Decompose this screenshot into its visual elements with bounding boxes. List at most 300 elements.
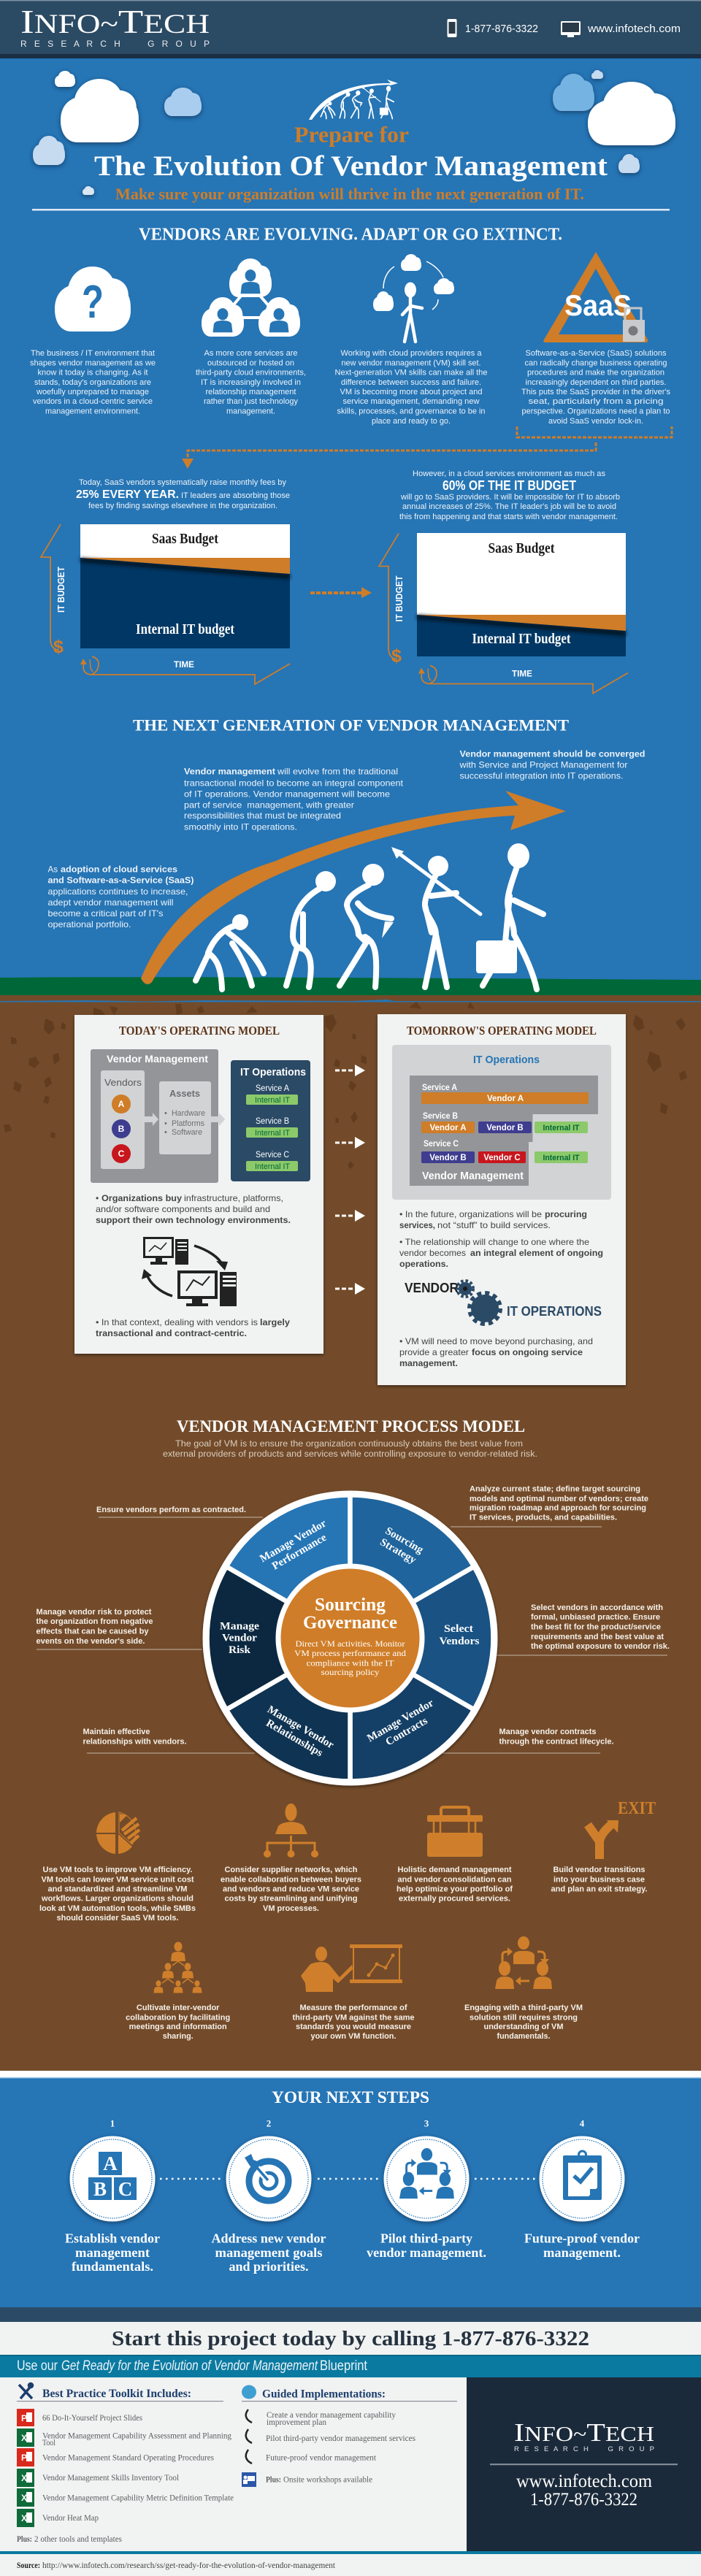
text: use VM tools: should consider SaaS VM tools. bbox=[57, 1914, 178, 1923]
text: vendor evolving column 1: woefully unprepared to manage bbox=[36, 388, 149, 396]
labels: wheel segments: Relationships bbox=[264, 1717, 325, 1759]
text: use VM tools: Use VM tools to improve VM efficiency. bbox=[42, 1866, 193, 1874]
banner: blueprint: Get Ready for the Evolution of Vendor Management bbox=[61, 2358, 318, 2374]
chart: today's budget split: Internal IT budget bbox=[136, 621, 234, 637]
banner: blueprint: Blueprint bbox=[320, 2358, 368, 2374]
diagram: vendor management to IT operations: Service A bbox=[256, 1084, 289, 1093]
icon: vendor and IT operations gears: VENDOR bbox=[405, 1281, 459, 1295]
text: vendor evolving column 4: perspective. Organizations need a plan to bbox=[521, 407, 670, 416]
step 1: 1 bbox=[110, 2117, 115, 2129]
arrow: dashed between budget charts bbox=[310, 587, 372, 598]
text: vendor evolving column 3: Working with cloud providers requires a bbox=[340, 349, 482, 358]
text: vendor management will evolve bbox=[184, 767, 404, 832]
diagram: vendor management to IT operations bbox=[91, 1049, 310, 1183]
text: cultivate inter-vendor: meetings and information bbox=[129, 2023, 227, 2031]
logo: R E S E A R C H G R O U P bbox=[20, 39, 210, 49]
text: measure performance: your own VM function. bbox=[311, 2032, 396, 2041]
diagram: integrated IT operations: Vendor B bbox=[429, 1154, 467, 1162]
text: vendor management should be converged: with Service and Project Management for bbox=[459, 760, 628, 770]
callout: select vendors: the best fit for the product/service bbox=[531, 1623, 661, 1632]
text: vendor transitions: into your business case bbox=[553, 1875, 645, 1884]
text: engaging third party: understanding of VM bbox=[483, 2023, 564, 2031]
callout: analyze current state: models and optimal number of vendors; create bbox=[470, 1495, 648, 1503]
step 2: and priorities. bbox=[229, 2259, 308, 2274]
text: supplier networks bbox=[221, 1866, 361, 1913]
icon: SaaS warning triangle with padlock bbox=[543, 252, 648, 342]
panel: best practice toolkit: Tool bbox=[42, 2437, 56, 2447]
icon: question cloud: ? bbox=[82, 275, 104, 328]
step 2: Address new vendor bbox=[212, 2231, 326, 2246]
text: vendor management should be converged: successful integration into IT operations. bbox=[460, 772, 624, 781]
text: in that context bbox=[96, 1317, 290, 1338]
text: engaging third party bbox=[464, 2004, 583, 2041]
text: holistic demand management: and vendor consolidation can bbox=[397, 1875, 511, 1884]
step 1 bbox=[65, 2117, 160, 2274]
icon: exit fork arrow bbox=[588, 1799, 656, 1859]
diagram: vendor management to IT operations: IT Operations bbox=[240, 1066, 306, 1078]
text: procuring services bbox=[399, 1209, 587, 1230]
chart axes: future IT budget and time: IT BUDGET bbox=[394, 575, 405, 622]
diagram: vendor management to IT operations: A bbox=[118, 1099, 125, 1109]
chart axes: future IT budget and time: TIME bbox=[512, 670, 532, 679]
labels: wheel segments: Strategy bbox=[378, 1536, 418, 1566]
text: vendor transitions bbox=[551, 1866, 647, 1894]
text: vendor evolving column 3: place and ready to go. bbox=[372, 417, 451, 426]
callout: manage vendor risk: Manage vendor risk to protect bbox=[37, 1608, 152, 1617]
heading: vendors are evolving: VENDORS ARE EVOLVING. ADAPT OR GO EXTINCT. bbox=[139, 225, 562, 244]
text: procuring services: not “stuff” to build services. bbox=[437, 1220, 551, 1230]
panel: contact bbox=[467, 2377, 701, 2551]
figures: evolution from ape to business person bbox=[196, 843, 543, 989]
website: www.infotech.com bbox=[587, 23, 681, 35]
callout: analyze current state bbox=[470, 1485, 648, 1522]
icon: excel: X bbox=[21, 2433, 27, 2443]
center: sourcing governance: VM process performance and bbox=[294, 1648, 406, 1658]
step 1: Establish vendor bbox=[65, 2231, 160, 2246]
heading: next steps: YOUR NEXT STEPS bbox=[272, 2088, 429, 2107]
text: use VM tools: VM tools can lower VM service unit cost bbox=[41, 1875, 194, 1884]
text: vendor evolving column 2: third-party cloud environments, bbox=[196, 369, 306, 377]
center: sourcing governance: Direct VM activities. Monitor bbox=[295, 1638, 405, 1649]
title block bbox=[94, 121, 608, 203]
text: focus on ongoing service: management. bbox=[399, 1358, 458, 1368]
segment: manage vendor relationships bbox=[226, 1638, 350, 1782]
text: adoption of cloud services: and Software-as-a-Service (SaaS) bbox=[48, 876, 194, 886]
text: adoption of cloud services: As bbox=[48, 865, 58, 875]
panel: best practice toolkit: Vendor Heat Map bbox=[42, 2512, 99, 2523]
diagram: integrated IT operations bbox=[392, 1045, 611, 1200]
text: integral element: • The relationship will change to one where the bbox=[399, 1237, 589, 1247]
diagram: integrated IT operations: Service A bbox=[422, 1084, 457, 1092]
title block: Prepare for bbox=[294, 121, 409, 147]
step 1: management bbox=[75, 2245, 150, 2260]
icon: two computers exchanging bbox=[142, 1237, 237, 1306]
callout: manage contracts: Manage vendor contracts bbox=[499, 1728, 596, 1736]
logo: INFO~ TECH bbox=[514, 2418, 654, 2447]
text: vendor evolving column 1: vendors in a cloud-centric service bbox=[33, 397, 153, 406]
labels: wheel segments: Manage bbox=[220, 1621, 259, 1633]
text: vendor evolving column 3 bbox=[334, 349, 488, 426]
diagram: vendor management to IT operations: • bbox=[164, 1128, 167, 1137]
diagram: vendor management to IT operations: Internal IT bbox=[255, 1129, 290, 1138]
step 1: A bbox=[103, 2153, 118, 2174]
source line: http://www.infotech.com/research/ss/get-ready-for-the-evolution-of-vendor-management bbox=[42, 2561, 336, 2570]
text: vendor management will evolve: part of service management, with greater bbox=[184, 800, 354, 810]
callout: select vendors: Select vendors in accordance with bbox=[531, 1603, 663, 1612]
step 1: fundamentals. bbox=[72, 2259, 153, 2274]
diagram: vendor management to IT operations: Hardware bbox=[172, 1109, 205, 1118]
labels: wheel segments: Manage Vendor bbox=[365, 1697, 436, 1744]
text: vendor evolving column 3: new vendor management (VM) skill set. bbox=[342, 359, 480, 367]
chart: today's budget split bbox=[80, 524, 290, 648]
text: holistic demand management: help optimize your portfolio of bbox=[397, 1885, 513, 1894]
text: integral element: vendor becomes bbox=[399, 1248, 466, 1258]
callout: manage vendor risk: effects that can be caused by bbox=[37, 1627, 149, 1636]
text: cultivate inter-vendor: collaboration by facilitating bbox=[126, 2014, 230, 2023]
panel: today's operating model bbox=[74, 1015, 323, 1354]
panel: guided implementations: Pilot third-party vendor management services bbox=[266, 2433, 415, 2443]
chart: process wheel bbox=[203, 1491, 498, 1786]
icon: tools bbox=[19, 2383, 32, 2399]
diagram: integrated IT operations: Internal IT bbox=[543, 1154, 580, 1162]
icon: powerpoint: P bbox=[21, 2453, 27, 2463]
callout: analyze current state: IT services, products, and capabilities. bbox=[470, 1513, 617, 1522]
text: vendor evolving column 4: procedures and make the organization bbox=[527, 369, 664, 377]
callout lines bbox=[37, 1517, 667, 1753]
banner: blueprint: Use our bbox=[17, 2358, 58, 2374]
icon: powerpoint bbox=[17, 2448, 34, 2466]
panel: guided implementations bbox=[242, 2385, 457, 2487]
text: procuring services: services, bbox=[399, 1220, 435, 1230]
source line: Source: bbox=[17, 2561, 40, 2570]
center: sourcing governance: sourcing policy bbox=[321, 1667, 380, 1677]
step 1: C bbox=[118, 2178, 132, 2200]
callout: ensure vendors perform: Ensure vendors perform as contracted. bbox=[96, 1506, 246, 1514]
diagram: vendor management to IT operations: Internal IT bbox=[255, 1162, 290, 1171]
chart axes: today's IT budget and time: TIME bbox=[174, 661, 194, 670]
text: organizations buy: and/or software components and build and bbox=[96, 1204, 270, 1214]
text: vendor evolving column 4 bbox=[521, 349, 670, 426]
text: 60% of the IT budget: annual increases of 25%. The IT leader's job will be to avoid bbox=[402, 502, 616, 511]
text: focus on ongoing service: • VM will need to move beyond purchasing, and bbox=[399, 1336, 593, 1346]
text: measure performance: standards you would measure bbox=[296, 2023, 411, 2031]
chart: future budget split: Saas Budget bbox=[488, 540, 555, 556]
text: supplier networks: Consider supplier networks, which bbox=[225, 1866, 358, 1874]
text: integral element: an integral element of ongoing bbox=[470, 1248, 603, 1258]
text: use VM tools: workflows. Larger organizations should bbox=[41, 1894, 194, 1903]
step 1: B bbox=[93, 2178, 107, 2200]
icon: excel bbox=[17, 2488, 34, 2507]
text: vendor evolving column 3: service management, demanding new bbox=[343, 397, 480, 406]
icon: question cloud bbox=[55, 267, 131, 331]
text: use VM tools: and standardized and streamline VM bbox=[48, 1885, 187, 1894]
panel: tomorrow's operating model bbox=[378, 1014, 626, 1385]
labels: wheel segments: Manage Vendor bbox=[265, 1703, 336, 1752]
text: cultivate inter-vendor: sharing. bbox=[163, 2032, 194, 2041]
callout: maintain relationships: Maintain effective bbox=[83, 1728, 150, 1736]
panel: your next steps bbox=[0, 2077, 701, 2307]
heading: process model: VENDOR MANAGEMENT PROCESS MODEL bbox=[177, 1417, 525, 1435]
text: focus on ongoing service bbox=[399, 1336, 593, 1368]
text: 25% every year bbox=[76, 478, 290, 510]
labels: wheel segments: Risk bbox=[229, 1644, 251, 1656]
chart: future budget split: Internal IT budget bbox=[472, 631, 571, 647]
icon: supplier network bbox=[264, 1803, 318, 1858]
icon: cloud network bbox=[202, 258, 300, 337]
text: organizations buy: Organizations buy bbox=[101, 1193, 182, 1203]
heading: process model bbox=[163, 1417, 537, 1459]
text: vendor evolving column 3: Next-generation VM skills can make all the bbox=[334, 369, 488, 377]
step 2: management goals bbox=[215, 2245, 323, 2260]
text: organizations buy bbox=[96, 1193, 291, 1225]
text: vendor evolving column 1: shapes vendor management as we bbox=[30, 359, 156, 367]
step 4: 4 bbox=[580, 2117, 585, 2129]
text: adoption of cloud services: adept vendor management will bbox=[48, 898, 174, 908]
labels: wheel segments bbox=[220, 1517, 480, 1762]
text: organizations buy: support their own technology environments. bbox=[96, 1215, 291, 1225]
text: 25% every year: IT leaders are absorbing those bbox=[181, 491, 290, 500]
callout: maintain relationships: relationships with vendors. bbox=[83, 1738, 187, 1747]
text: organizations buy: infrastructure, platforms, bbox=[184, 1193, 283, 1203]
center: sourcing governance bbox=[276, 1564, 425, 1713]
text: vendor management will evolve: of IT operations. Vendor management will become bbox=[184, 789, 390, 799]
diagram: integrated IT operations: Vendor A bbox=[487, 1095, 524, 1103]
step 3: 3 bbox=[424, 2117, 429, 2129]
text: 25% every year: 25% EVERY YEAR. bbox=[76, 488, 179, 501]
text: supplier networks: enable collaboration between buyers bbox=[221, 1875, 361, 1884]
chart: today's budget split: Saas Budget bbox=[152, 531, 218, 547]
diagram: integrated IT operations: Vendor C bbox=[483, 1154, 521, 1162]
icon: phone bbox=[447, 19, 457, 37]
text: organizations buy: • bbox=[96, 1193, 99, 1203]
labels: wheel segments: Vendors bbox=[440, 1636, 480, 1647]
labels: wheel segments: Contracts bbox=[384, 1715, 430, 1748]
panel: guided implementations: Create a vendor management capability bbox=[267, 2410, 396, 2420]
segment: manage vendor performance bbox=[226, 1495, 350, 1638]
icon: monitor bbox=[561, 21, 581, 37]
text: cultivate inter-vendor bbox=[126, 2004, 230, 2041]
text: vendor evolving column 2: As more core services are bbox=[204, 349, 298, 358]
text: 60% of the IT budget: this from happening and that starts with vendor management. bbox=[399, 513, 618, 521]
arrows: white dashed between operating models bbox=[335, 1065, 365, 1295]
ground: green strip bbox=[0, 977, 701, 995]
icon: excel bbox=[17, 2429, 34, 2447]
text: vendor evolving column 4: increasingly dependent on third parties. bbox=[526, 378, 666, 387]
labels: wheel segments: Sourcing bbox=[383, 1525, 426, 1556]
callout: analyze current state: migration roadmap and approach for sourcing bbox=[470, 1504, 646, 1513]
diagram: vendor management to IT operations: • bbox=[164, 1109, 167, 1118]
text: vendor evolving column 2: outsourced or hosted on bbox=[207, 359, 294, 367]
callout: maintain relationships bbox=[83, 1728, 187, 1747]
diagram: integrated IT operations: Internal IT bbox=[543, 1124, 580, 1132]
segment: select vendors bbox=[350, 1567, 493, 1710]
diagram: vendor management to IT operations: Software bbox=[172, 1128, 202, 1137]
heading: process model: The goal of VM is to ensure the organization continuously obtains the best value from bbox=[175, 1440, 523, 1449]
callout: manage vendor risk: events on the vendor's side. bbox=[37, 1637, 145, 1646]
icon: vendor hierarchy bbox=[153, 1942, 202, 1993]
text: measure performance: third-party VM against the same bbox=[292, 2014, 415, 2023]
icon: pie chart bbox=[96, 1812, 139, 1854]
segment: manage vendor contracts bbox=[350, 1638, 474, 1782]
icon: exit fork arrow: EXIT bbox=[618, 1799, 656, 1818]
diagram: integrated IT operations: IT Operations bbox=[473, 1054, 540, 1066]
text: vendor evolving column 1: management environment. bbox=[45, 407, 140, 416]
header bar bbox=[0, 0, 701, 58]
diagram: vendor management to IT operations: Platforms bbox=[172, 1119, 204, 1128]
callout: select vendors: the optimal exposure to vendor risk. bbox=[531, 1642, 670, 1651]
text: integral element: operations. bbox=[399, 1259, 448, 1269]
callout: analyze current state: Analyze current state; define target sourcing bbox=[470, 1485, 640, 1494]
text: vendor management should be converged: Vendor management should be converged bbox=[460, 749, 646, 759]
text: focus on ongoing service: provide a greater bbox=[399, 1347, 469, 1357]
title block: Make sure your organization will thrive in the next generation of IT. bbox=[115, 185, 584, 203]
icon: third-party cycle bbox=[495, 1936, 552, 1989]
panel: best practice toolkit: 66 Do-It-Yourself Project Slides bbox=[42, 2412, 142, 2423]
text: adoption of cloud services: operational portfolio. bbox=[48, 920, 131, 929]
text: vendor evolving column 1 bbox=[30, 349, 156, 416]
text: vendor management will evolve: Vendor management bbox=[184, 767, 275, 777]
segment: sourcing strategy bbox=[350, 1495, 474, 1638]
step 2 bbox=[212, 2117, 326, 2274]
diagram: vendor management to IT operations: • bbox=[164, 1119, 167, 1128]
callout: manage vendor risk bbox=[37, 1608, 153, 1646]
diagram: integrated IT operations: Vendor B bbox=[486, 1124, 524, 1132]
icon: powerpoint bbox=[17, 2409, 34, 2426]
icon: juggling cloud figure bbox=[373, 254, 454, 342]
text: vendor management will evolve: responsibilities that must be integrated bbox=[184, 811, 341, 821]
arrow: large orange evolution arc bbox=[141, 791, 566, 984]
callout: select vendors bbox=[531, 1603, 670, 1651]
panel: brown soil background bbox=[0, 995, 701, 2071]
text: measure performance bbox=[292, 2004, 415, 2041]
text: engaging third party: solution still requires strong bbox=[470, 2014, 578, 2023]
text: vendor evolving column 2: rather than just technology bbox=[204, 397, 299, 406]
callout: select vendors: formal, unbiased practice. Ensure bbox=[531, 1613, 660, 1622]
callout: manage contracts bbox=[499, 1728, 613, 1747]
callout: manage vendor risk: the organization from negative bbox=[37, 1617, 153, 1626]
panel: guided implementations: Plus: bbox=[266, 2474, 281, 2484]
diagram: vendor management to IT operations: B bbox=[118, 1124, 125, 1134]
heading: process model: external providers of products and services while controlling exposure to vendor-related risk. bbox=[163, 1450, 537, 1459]
text: vendor evolving column 4: This puts the SaaS provider in the driver's bbox=[521, 388, 670, 396]
icon: mini evolution figures with arc arrow bbox=[309, 80, 398, 120]
panel: guided implementations: improvement plan bbox=[267, 2417, 326, 2427]
diagram: integrated IT operations: Service B bbox=[423, 1112, 458, 1121]
icon: excel bbox=[17, 2469, 34, 2487]
chart axes: today's IT budget and time bbox=[41, 524, 290, 684]
step 4 bbox=[524, 2117, 640, 2260]
chart axes: today's IT budget and time: $ bbox=[53, 637, 64, 657]
diagram: vendor management to IT operations: Internal IT bbox=[255, 1096, 290, 1105]
panel: best practice toolkit: Vendor Management Capability Assessment and Planning bbox=[42, 2430, 231, 2440]
text: vendor evolving column 4: Software-as-a-Service (SaaS) solutions bbox=[526, 349, 666, 358]
icon: globe bbox=[242, 2385, 256, 2399]
phone number: 1-877-876-3322 bbox=[465, 23, 538, 35]
text: vendor evolving column 2: relationship management bbox=[206, 388, 296, 396]
center: sourcing governance: compliance with the IT bbox=[307, 1657, 394, 1668]
step 3: vendor management. bbox=[367, 2245, 486, 2260]
text: adoption of cloud services: adoption of cloud services bbox=[61, 865, 177, 875]
labels: wheel segments: Select bbox=[444, 1623, 473, 1635]
text: vendor evolving column 1: know it today is changing. As it bbox=[38, 369, 148, 377]
text: holistic demand management bbox=[397, 1866, 513, 1903]
text: supplier networks: costs by streamlining and unifying bbox=[225, 1894, 358, 1903]
diagram: vendor management to IT operations: Assets bbox=[169, 1088, 200, 1099]
text: vendor evolving column 4: can radically change business operating bbox=[524, 359, 667, 367]
text: adoption of cloud services bbox=[48, 865, 194, 929]
text: engaging third party: Engaging with a third-party VM bbox=[464, 2004, 583, 2012]
heading: start this project: Start this project today by calling 1-877-876-3322 bbox=[112, 2327, 589, 2350]
diagram: integrated IT operations: Vendor A bbox=[429, 1124, 467, 1132]
diagram: vendor management to IT operations: Service B bbox=[256, 1117, 289, 1126]
icon: powerpoint: P bbox=[21, 2413, 27, 2423]
text: vendor evolving column 3: skills, processes, and governance to be in bbox=[337, 407, 486, 416]
text: vendor management will evolve: transactional model to become an integral component bbox=[184, 778, 404, 788]
panel: guided implementations: Onsite workshops available bbox=[283, 2474, 372, 2484]
panel: best practice toolkit: Vendor Management Skills Inventory Tool bbox=[42, 2472, 180, 2483]
text: use VM tools bbox=[39, 1866, 196, 1923]
diagram: vendor management to IT operations: Vendor Management bbox=[107, 1053, 208, 1065]
text: engaging third party: fundamentals. bbox=[497, 2032, 551, 2041]
text: vendor management will evolve: smoothly into IT operations. bbox=[184, 822, 297, 832]
labels: wheel segments: Performance bbox=[270, 1532, 329, 1572]
icon: excel bbox=[17, 2509, 34, 2527]
icon: presenter with chart bbox=[301, 1944, 402, 1992]
text: vendor evolving column 2 bbox=[196, 349, 306, 416]
text: integral element bbox=[399, 1237, 603, 1269]
panel: best practice toolkit bbox=[17, 2383, 234, 2544]
text: supplier networks: and vendors and reduce VM service bbox=[223, 1885, 359, 1894]
text: in that context: largely bbox=[260, 1317, 290, 1327]
icon: excel: X bbox=[21, 2513, 27, 2523]
arrow: dashed bracket from SaaS to budget chart bbox=[182, 426, 672, 469]
text: in that context: • In that context, dealing with vendors is bbox=[96, 1317, 258, 1327]
panel: light call to action background bbox=[0, 2322, 701, 2576]
text: holistic demand management: Holistic demand management bbox=[397, 1866, 512, 1874]
icon: excel: X bbox=[21, 2493, 27, 2503]
icon: onsite workshop bbox=[242, 2472, 256, 2487]
step 4: Future-proof vendor bbox=[524, 2231, 640, 2246]
center: sourcing governance: Sourcing bbox=[315, 1595, 386, 1615]
text: vendor management should be converged bbox=[459, 749, 646, 781]
text: vendor evolving column 1: stands, today's organizations are bbox=[34, 378, 151, 387]
segment: manage vendor risk bbox=[207, 1567, 350, 1710]
text: adoption of cloud services: applications continues to increase, bbox=[48, 887, 188, 897]
logo: INFO~ TECH bbox=[20, 3, 210, 40]
icon: SaaS warning triangle with padlock: SaaS bbox=[564, 290, 632, 322]
title block: The Evolution Of Vendor Management bbox=[94, 150, 608, 182]
website and phone: www.infotech.com bbox=[516, 2472, 653, 2491]
text: vendor evolving column 4: avoid SaaS vendor lock-in. bbox=[548, 417, 643, 426]
text: 60% of the IT budget: will go to SaaS providers. It will be impossible for IT to absorb bbox=[400, 493, 620, 502]
step 3 bbox=[367, 2117, 486, 2260]
text: 25% every year: fees by finding savings elsewhere in the organization. bbox=[88, 502, 277, 510]
icon: vendor and IT operations gears bbox=[405, 1281, 602, 1324]
text: vendor evolving column 2: IT is increasingly involved in bbox=[201, 378, 301, 387]
text: 60% of the IT budget: However, in a cloud services environment as much as bbox=[413, 469, 605, 478]
panel: guided implementations: Future-proof vendor management bbox=[266, 2452, 377, 2462]
text: use VM tools: look at VM automation tools, while SMBs bbox=[39, 1904, 196, 1913]
text: 60% of the IT budget bbox=[399, 469, 620, 521]
text: 60% of the IT budget: 60% OF THE IT BUDGET bbox=[443, 478, 576, 493]
panel: best practice toolkit: Plus: bbox=[17, 2534, 32, 2544]
text: cultivate inter-vendor: Cultivate inter-vendor bbox=[137, 2004, 220, 2012]
text: vendor transitions: Build vendor transitions bbox=[553, 1866, 646, 1874]
text: in that context: transactional and contract-centric. bbox=[96, 1328, 247, 1338]
text: focus on ongoing service: focus on ongoing service bbox=[472, 1347, 583, 1357]
text: vendor evolving column 4: seat, particularly from a pricing bbox=[529, 397, 664, 406]
text: measure performance: Measure the performance of bbox=[299, 2004, 407, 2012]
